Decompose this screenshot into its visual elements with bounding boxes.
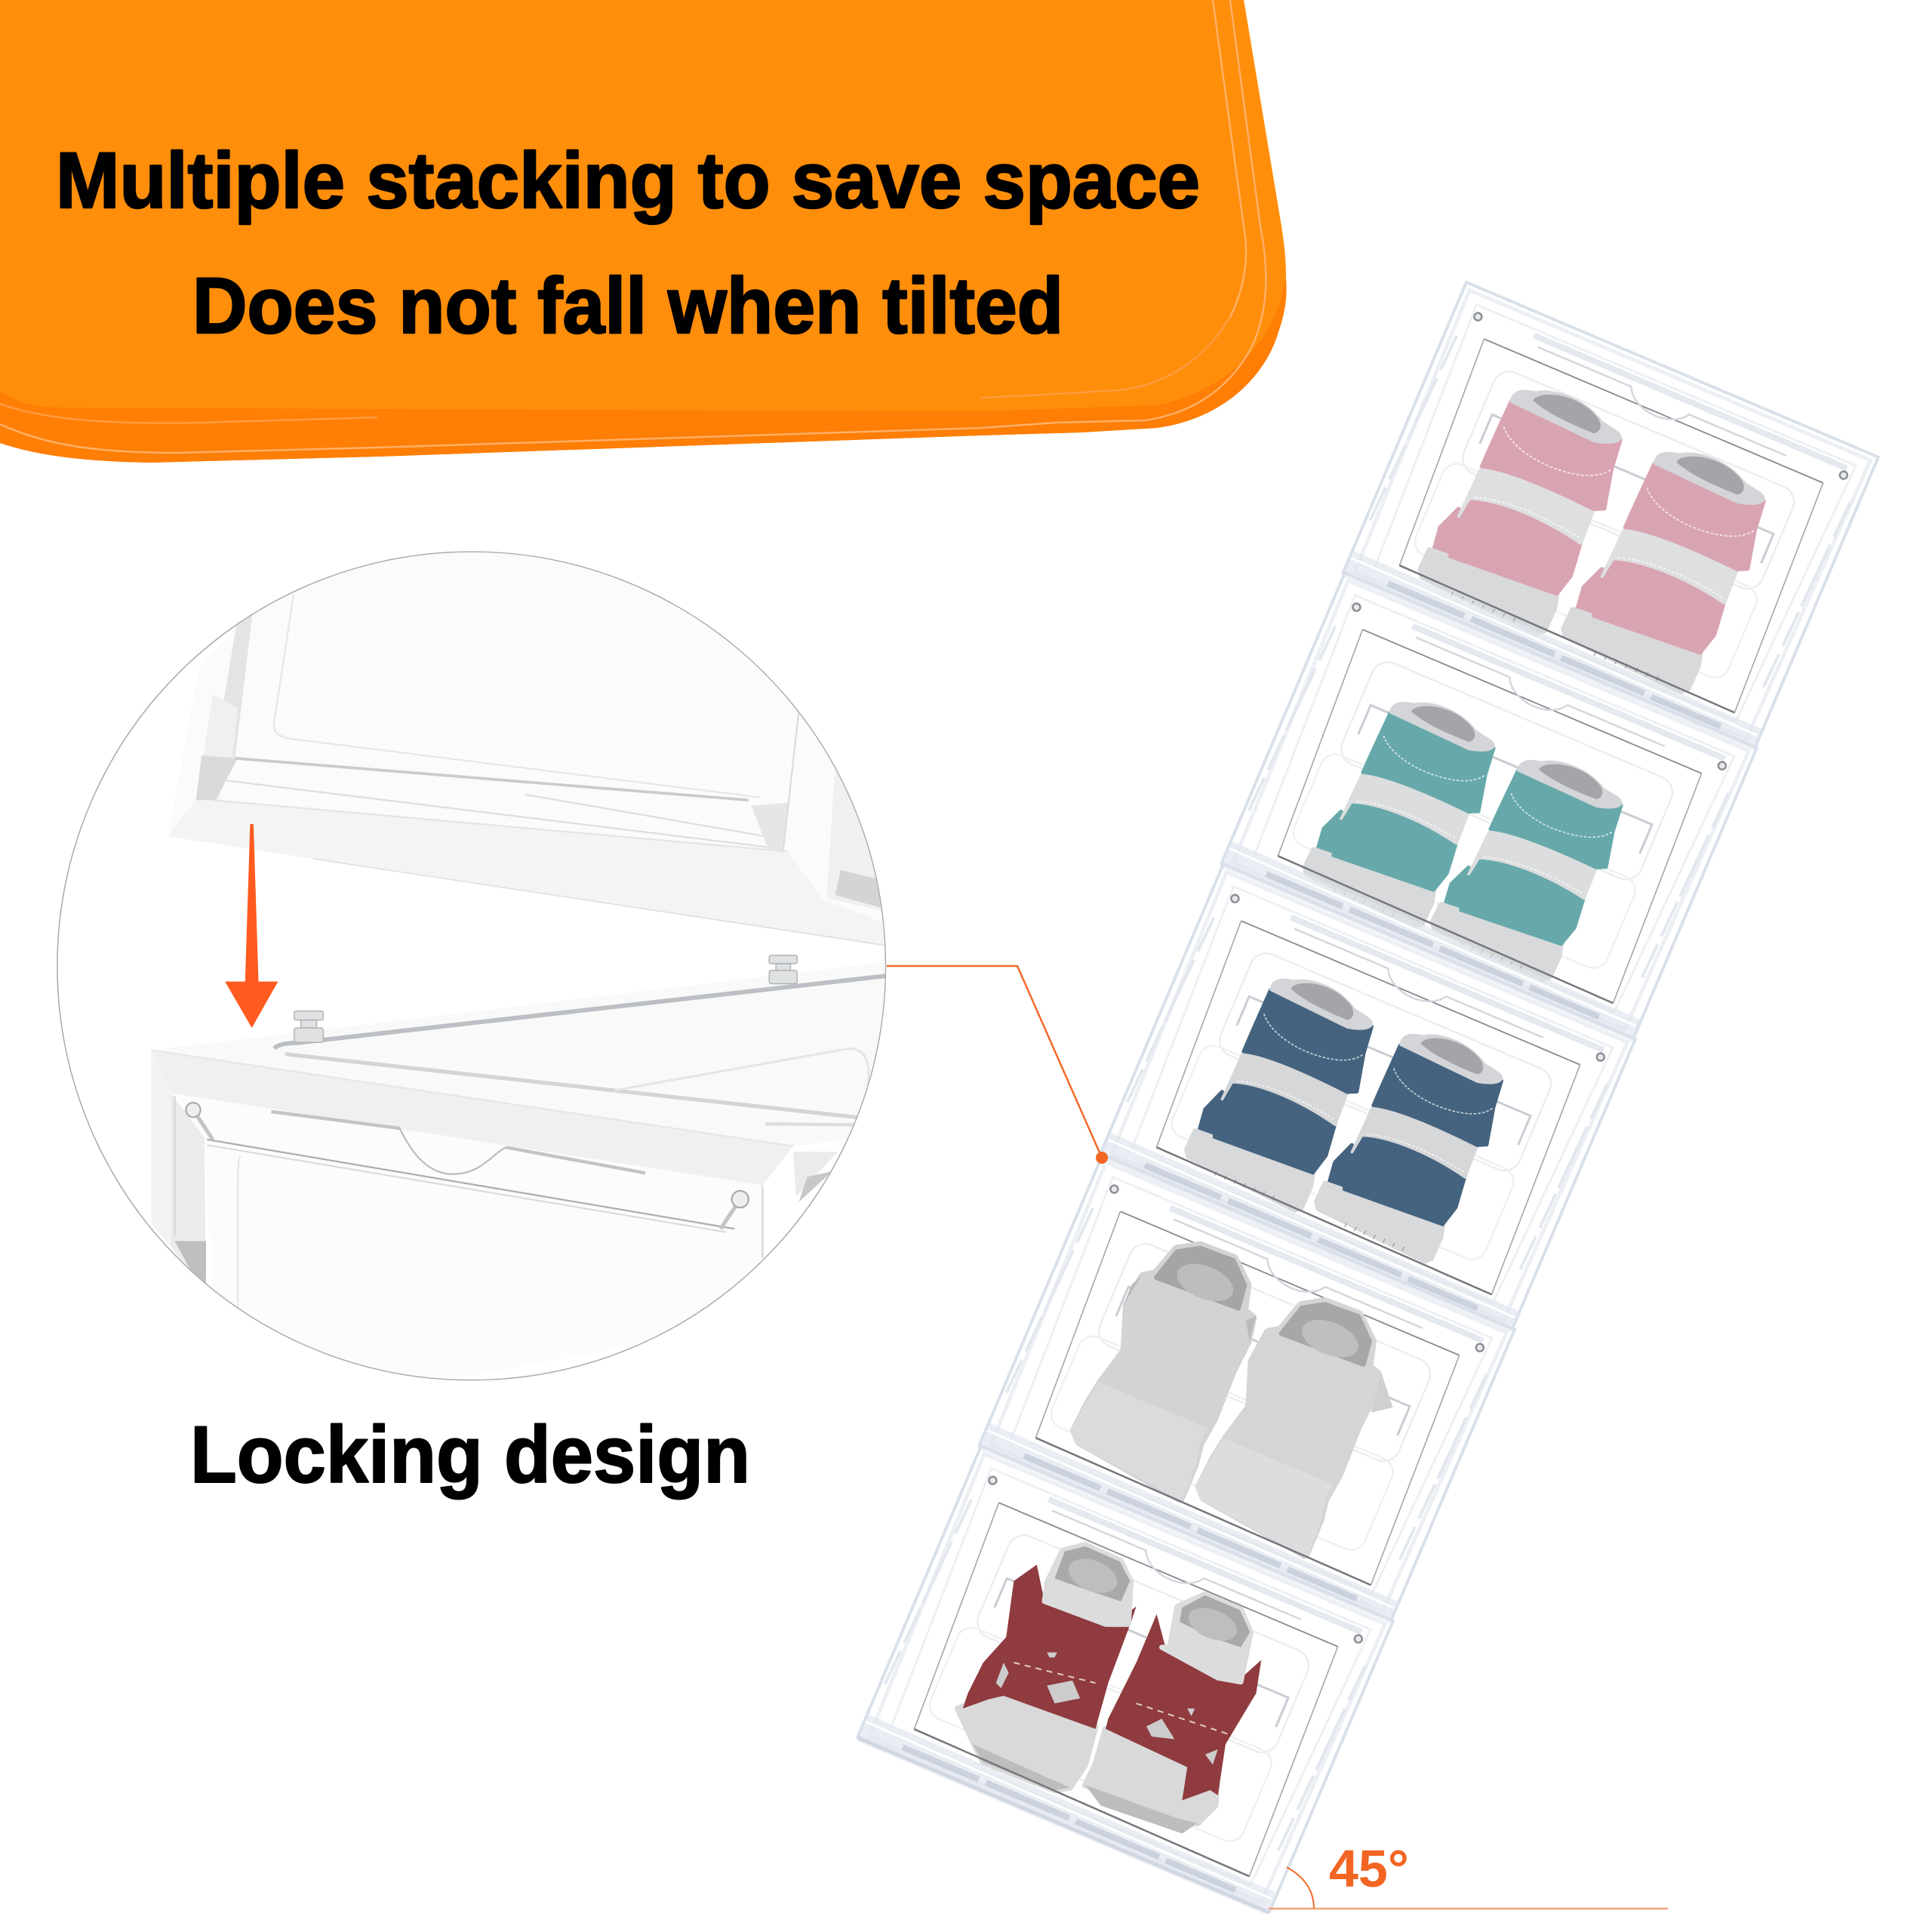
- arrow: downward locking arrow: [225, 824, 278, 1028]
- banner top layer: [0, 0, 1286, 411]
- product: tilted stack of five clear shoe boxes: [856, 282, 1878, 1915]
- box 4: grey shoes: [977, 1155, 1515, 1624]
- title: second line: Does not fall when tilted: [192, 262, 1063, 350]
- locking pin: right: [769, 955, 797, 984]
- locking pin: left: [294, 1011, 323, 1042]
- callout: connector from detail circle to stack: [887, 966, 1108, 1164]
- box 2: teal shoes: [1220, 573, 1757, 1042]
- banner inner highlight: [1213, 0, 1246, 317]
- box 5: red shoes: [856, 1446, 1393, 1915]
- banner faded highlight: [0, 317, 1230, 423]
- lower box: [152, 962, 885, 1392]
- panel: orange header banner: [0, 0, 1287, 463]
- annotation: 45 degree angle: [1269, 1839, 1668, 1909]
- banner darker edge: [0, 277, 1287, 463]
- upper box: [168, 543, 885, 946]
- banner outer highlight: [0, 0, 1266, 453]
- annotation: 45 degree angle: 45°: [1329, 1839, 1409, 1898]
- panel: locking design detail circle: [57, 543, 885, 1392]
- heading: locking design: Locking design: [190, 1409, 750, 1500]
- box 1: pink shoes: [1341, 282, 1878, 752]
- title: first line: Multiple stacking to save space: [56, 137, 1200, 225]
- box 3: navy shoes: [1098, 864, 1635, 1334]
- banner lower layer: [0, 0, 1285, 463]
